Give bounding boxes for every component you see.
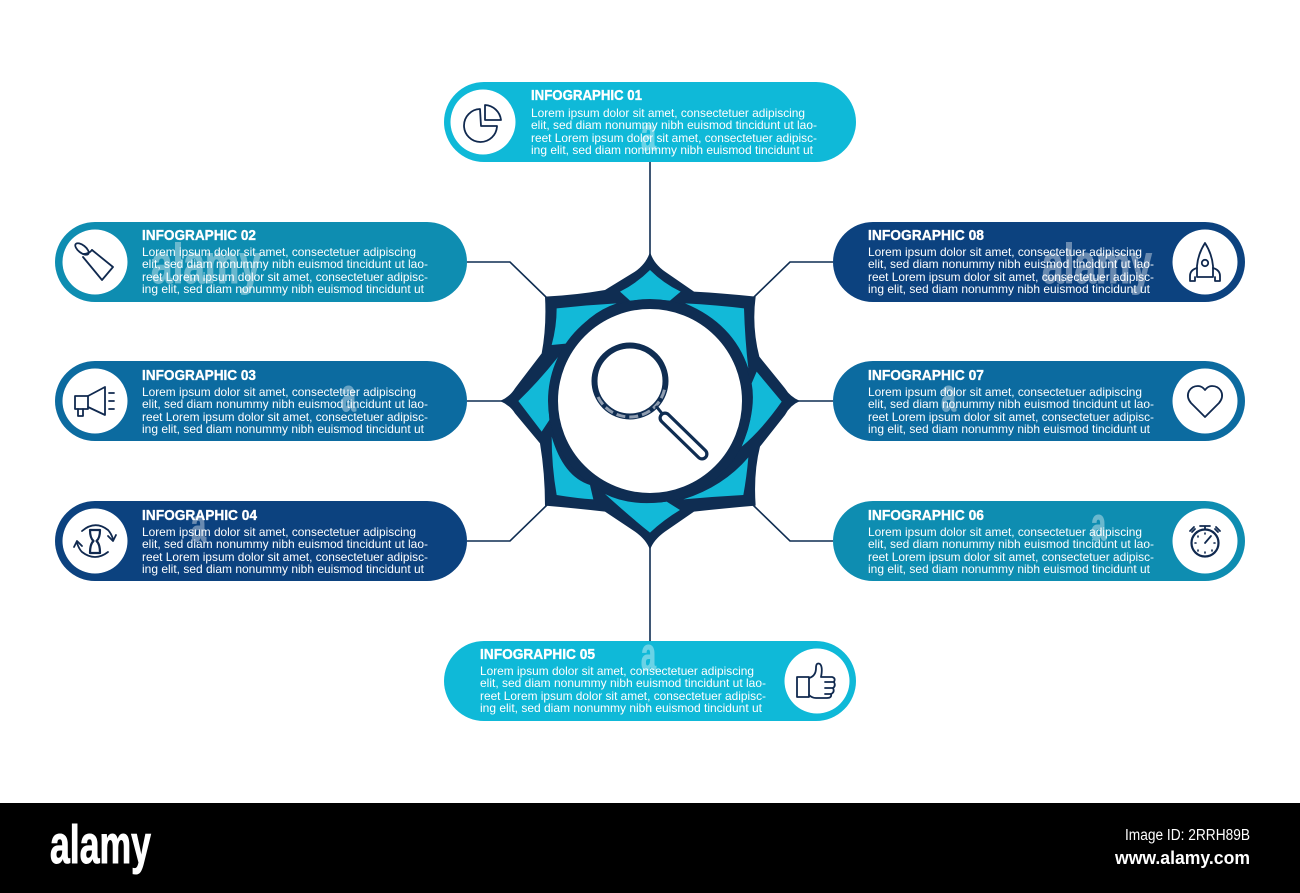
panel: infographic 07: INFOGRAPHIC 07 [868, 368, 984, 384]
panel: infographic 04: reet Lorem ipsum dolor sit amet, consectetuer adipisc- [142, 550, 428, 564]
center circle [553, 304, 747, 498]
panel: infographic 06: elit, sed diam nonummy nibh euismod tincidunt ut lao- [868, 537, 1154, 551]
panel: infographic 08: Lorem ipsum dolor sit amet, consectetuer adipiscing [868, 245, 1142, 259]
panel: infographic 06: ing elit, sed diam nonummy nibh euismod tincidunt ut [868, 562, 1151, 576]
panel: infographic 07: Lorem ipsum dolor sit amet, consectetuer adipiscing [868, 385, 1142, 399]
panel: infographic 03: ing elit, sed diam nonummy nibh euismod tincidunt ut [142, 422, 425, 436]
panel: infographic 03: reet Lorem ipsum dolor sit amet, consectetuer adipisc- [142, 410, 428, 424]
panel: infographic 03: a [341, 369, 356, 421]
panel: infographic 04: INFOGRAPHIC 04 [142, 508, 257, 524]
icon: heart [1188, 386, 1222, 417]
icon: hourglass with arrows [74, 525, 116, 557]
panel: infographic 03: Lorem ipsum dolor sit amet, consectetuer adipiscing [142, 385, 416, 399]
panel: infographic 08 [833, 222, 1245, 302]
panel: infographic 06 [833, 498, 1245, 581]
panel: infographic 07: elit, sed diam nonummy nibh euismod tincidunt ut lao- [868, 397, 1154, 411]
panel: infographic 03: elit, sed diam nonummy nibh euismod tincidunt ut lao- [142, 397, 428, 411]
panel: infographic 07: reet Lorem ipsum dolor sit amet, consectetuer adipisc- [868, 410, 1154, 424]
panel: infographic 08: elit, sed diam nonummy nibh euismod tincidunt ut lao- [868, 257, 1154, 271]
panel: infographic 04: elit, sed diam nonummy nibh euismod tincidunt ut lao- [142, 537, 428, 551]
panel: infographic 02: alamy [151, 232, 261, 295]
icon: megaphone [75, 387, 114, 416]
panel: infographic 05: INFOGRAPHIC 05 [480, 647, 595, 663]
panel: infographic 01: reet Lorem ipsum dolor sit amet, consectetuer adipisc- [531, 131, 817, 145]
flower outline [500, 252, 800, 550]
panel: infographic 05: a [641, 628, 656, 680]
icon: thumbs up [797, 664, 835, 698]
panel: infographic 08: reet Lorem ipsum dolor sit amet, consectetuer adipisc- [868, 270, 1154, 284]
panel: infographic 08: INFOGRAPHIC 08 [868, 228, 984, 244]
panel: infographic 08: alamy [1042, 232, 1152, 295]
panel: infographic 06: INFOGRAPHIC 06 [868, 508, 984, 524]
icon: price tag [73, 241, 113, 280]
image id: Image ID: 2RRH89B [1125, 827, 1250, 844]
panel: infographic 01: a [641, 108, 656, 160]
panel: infographic 01: elit, sed diam nonummy nibh euismod tincidunt ut lao- [531, 118, 817, 132]
icon: stopwatch [1190, 526, 1220, 556]
connector lines [467, 162, 833, 641]
panel: infographic 01: ing elit, sed diam nonummy nibh euismod tincidunt ut [531, 143, 814, 157]
panel: infographic 03: INFOGRAPHIC 03 [142, 368, 256, 384]
footer logo: alamy [50, 815, 151, 875]
panel: infographic 01: INFOGRAPHIC 01 [531, 88, 642, 104]
panel: infographic 05: ing elit, sed diam nonummy nibh euismod tincidunt ut [480, 701, 763, 715]
panel: infographic 07 [833, 361, 1245, 441]
panel: infographic 02: INFOGRAPHIC 02 [142, 228, 256, 244]
central flower emblem [500, 252, 800, 550]
website: www.alamy.com [1114, 848, 1250, 868]
panel: infographic 05: Lorem ipsum dolor sit amet, consectetuer adipiscing [480, 664, 754, 678]
panel: infographic 04 [55, 499, 467, 581]
icon: magnifying glass [594, 346, 702, 454]
panel: infographic 07: a [941, 369, 956, 421]
panel: infographic 04: a [191, 499, 206, 551]
panel: infographic 01: Lorem ipsum dolor sit amet, consectetuer adipiscing [531, 106, 805, 120]
panel: infographic 02: Lorem ipsum dolor sit amet, consectetuer adipiscing [142, 245, 416, 259]
panel: infographic 02: ing elit, sed diam nonummy nibh euismod tincidunt ut [142, 282, 425, 296]
panel: infographic 03 [55, 361, 467, 441]
panel: infographic 04: Lorem ipsum dolor sit amet, consectetuer adipiscing [142, 525, 416, 539]
panel: infographic 06: reet Lorem ipsum dolor sit amet, consectetuer adipisc- [868, 550, 1154, 564]
panel: infographic 04: ing elit, sed diam nonummy nibh euismod tincidunt ut [142, 562, 425, 576]
panel: infographic 05: reet Lorem ipsum dolor sit amet, consectetuer adipisc- [480, 689, 766, 703]
panel: infographic 02 [55, 222, 467, 302]
panel: infographic 07: ing elit, sed diam nonummy nibh euismod tincidunt ut [868, 422, 1151, 436]
panel: infographic 02: reet Lorem ipsum dolor sit amet, consectetuer adipisc- [142, 270, 428, 284]
icon: pie chart [464, 105, 501, 142]
icon: rocket [1190, 243, 1220, 281]
panel: infographic 02: elit, sed diam nonummy nibh euismod tincidunt ut lao- [142, 257, 428, 271]
panel: infographic 01 [444, 82, 856, 162]
panel: infographic 06: a [1091, 498, 1106, 550]
panel: infographic 06: Lorem ipsum dolor sit amet, consectetuer adipiscing [868, 525, 1142, 539]
panel: infographic 08: ing elit, sed diam nonummy nibh euismod tincidunt ut [868, 282, 1151, 296]
footer bar [0, 803, 1300, 893]
panel: infographic 05 [444, 628, 856, 721]
petals [518, 270, 782, 533]
panel: infographic 05: elit, sed diam nonummy nibh euismod tincidunt ut lao- [480, 676, 766, 690]
